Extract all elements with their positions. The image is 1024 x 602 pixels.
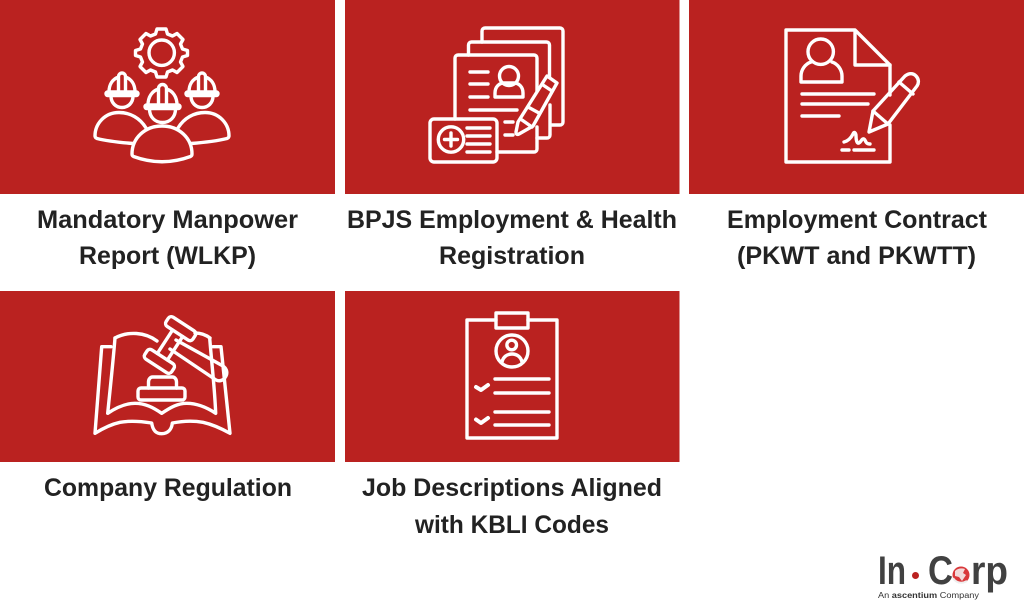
- icon: job description clipboard: [467, 313, 557, 438]
- logo: InCorp: [878, 549, 1008, 600]
- panel: employment contract: [689, 0, 1024, 194]
- heading: employment contract: Employment Contract: [727, 206, 988, 234]
- logo: InCorp: C: [928, 549, 953, 593]
- logo: InCorp: An ascentium Company: [878, 591, 979, 600]
- icon: law book and gavel: [95, 315, 230, 434]
- icon: contract with pencil: [786, 30, 918, 162]
- panel: company regulation: [0, 291, 335, 462]
- panel: BPJS registration: [345, 0, 680, 194]
- heading: mandatory manpower report: Report (WLKP): [79, 242, 256, 270]
- heading: job descriptions: Job Descriptions Aligned: [362, 474, 662, 502]
- icon: workers and gear: [95, 29, 229, 162]
- heading: employment contract: (PKWT and PKWTT): [737, 242, 976, 270]
- logo: InCorp: In: [878, 549, 906, 593]
- icon: documents with health card: [430, 28, 563, 162]
- logo: InCorp: rp: [971, 549, 1008, 593]
- heading: BPJS registration: BPJS Employment & Health: [347, 206, 677, 234]
- heading: BPJS registration: Registration: [439, 242, 585, 270]
- heading: job descriptions: with KBLI Codes: [414, 511, 609, 539]
- panel: manpower report: [0, 0, 335, 194]
- panel: job descriptions: [345, 291, 680, 462]
- heading: company regulation: Company Regulation: [44, 474, 292, 502]
- heading: mandatory manpower report: Mandatory Manpower: [37, 206, 298, 234]
